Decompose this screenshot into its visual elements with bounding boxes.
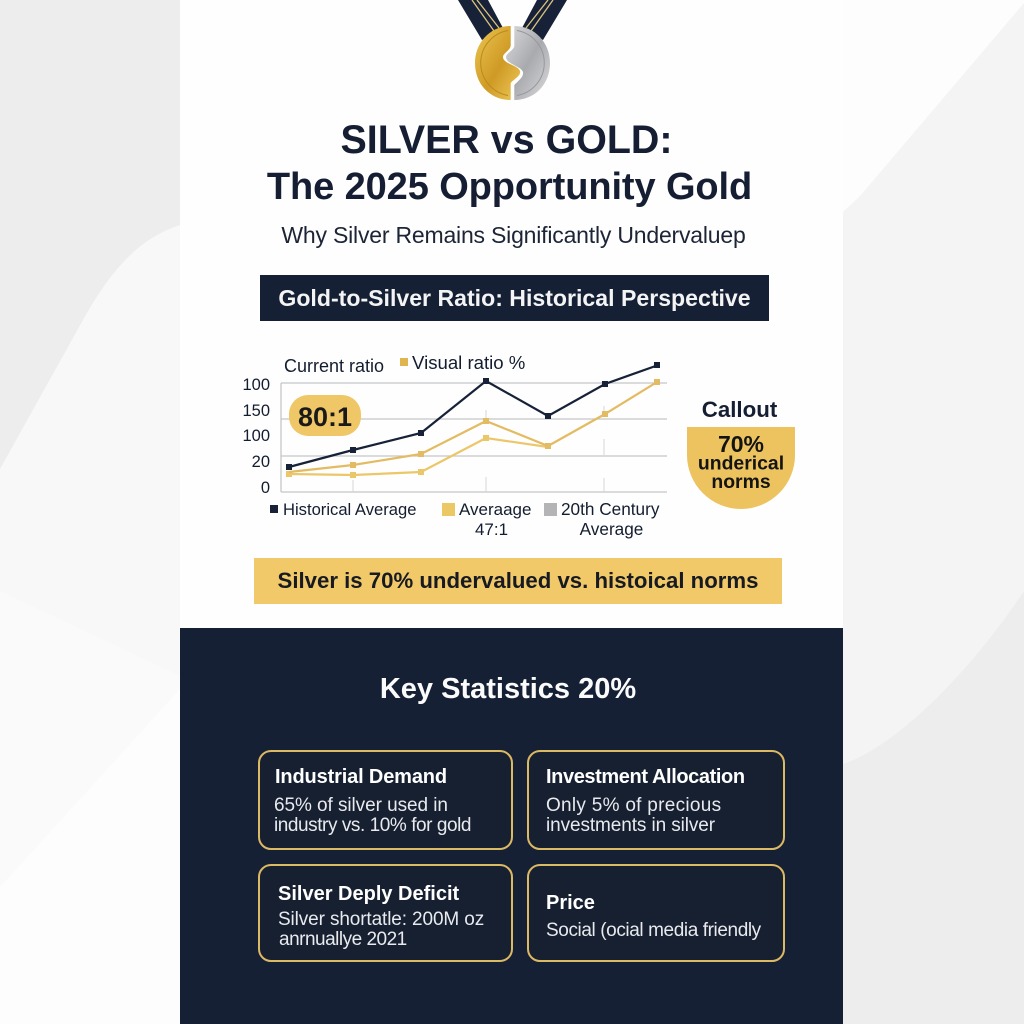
card: industrial demand <box>258 750 513 850</box>
legend: average 47:1: Averaage <box>459 500 531 519</box>
takeaway banner: Silver is 70% undervalued vs. histoical norms <box>278 568 758 593</box>
80:1 badge <box>289 395 361 436</box>
line chart <box>242 352 667 539</box>
legend: average 47:1 <box>442 500 531 539</box>
navy series <box>286 362 660 470</box>
card: industrial demand: industry vs. 10% for gold <box>274 814 471 836</box>
callout: underical <box>698 452 784 474</box>
y axis labels: 100 <box>242 427 270 445</box>
card: silver supply deficit: anrnuallye 2021 <box>279 929 407 950</box>
card: price <box>527 864 785 962</box>
card: silver supply deficit: Silver Deply Deficit <box>278 883 459 905</box>
takeaway banner <box>254 558 782 604</box>
icon: gold and silver medal <box>458 0 567 100</box>
card: industrial demand: 65% of silver used in <box>274 794 448 816</box>
card: investment allocation: investments in silver <box>546 814 715 836</box>
legend: average 47:1: 47:1 <box>475 520 508 539</box>
subtitle: Why Silver Remains Significantly Undervaluep <box>281 222 746 248</box>
upper gold series <box>289 379 660 472</box>
chart grid <box>281 383 667 492</box>
legend: 20th century average <box>544 499 660 539</box>
y axis labels: 20 <box>252 453 270 471</box>
white content panel <box>180 0 843 628</box>
lower gold series <box>286 435 548 478</box>
legend: 20th century average: 20th Century <box>561 499 660 519</box>
y axis labels: 100 <box>242 376 270 394</box>
visual ratio label: Visual ratio % <box>412 352 525 373</box>
section banner <box>260 275 769 321</box>
card: price: Price <box>546 892 595 914</box>
section banner: Gold-to-Silver Ratio: Historical Perspective <box>278 285 751 311</box>
title: SILVER vs GOLD: <box>341 118 672 162</box>
callout: Callout <box>702 397 778 422</box>
current ratio label: Current ratio <box>284 356 384 376</box>
y axis labels: 150 <box>242 402 270 420</box>
title: The 2025 Opportunity Gold <box>267 166 752 208</box>
y axis labels <box>242 376 270 497</box>
card: investment allocation <box>527 750 785 850</box>
title <box>267 118 752 208</box>
callout: norms <box>711 471 771 493</box>
card: industrial demand: Industrial Demand <box>275 766 447 788</box>
card: price: Social (ocial media friendly <box>546 920 761 941</box>
statistics heading: Key Statistics 20% <box>380 673 636 705</box>
callout: 70% <box>718 431 764 457</box>
card: investment allocation: Investment Allocation <box>546 766 745 788</box>
card: silver supply deficit <box>258 864 513 962</box>
y axis labels: 0 <box>261 479 270 497</box>
card: silver supply deficit: Silver shortatle: 200M oz <box>278 909 484 930</box>
card: investment allocation: Only 5% of precious <box>546 794 721 816</box>
legend: 20th century average: Average <box>580 519 643 539</box>
80:1 badge: 80:1 <box>298 402 352 432</box>
callout <box>687 397 795 509</box>
legend: historical average: Historical Average <box>283 500 416 519</box>
dark statistics panel <box>180 628 843 1024</box>
